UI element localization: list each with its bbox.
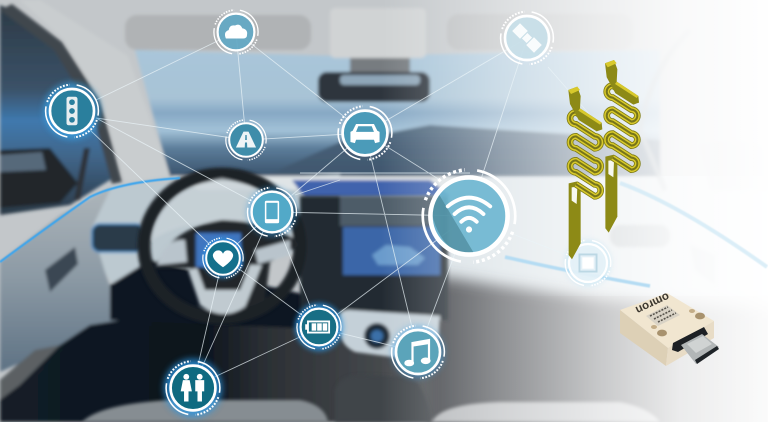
- armrest: [0, 345, 60, 400]
- node: chip: [565, 240, 611, 286]
- node: satellite: [501, 12, 553, 64]
- node: car: [338, 106, 392, 160]
- side window: [0, 5, 113, 215]
- ambient light lines: [0, 178, 767, 286]
- side mirror: [0, 148, 78, 208]
- icon: music note: [404, 339, 431, 366]
- center stack: [300, 196, 448, 320]
- QR code: [646, 305, 680, 326]
- node: music: [392, 326, 444, 378]
- lower dark cabin: [0, 285, 450, 422]
- node: heart health: [203, 238, 243, 278]
- right dark road: [265, 125, 660, 176]
- pillar: [20, 0, 170, 182]
- door handle: [45, 247, 78, 292]
- pale right dash area: [440, 176, 768, 296]
- node: people: [164, 359, 222, 417]
- icon: people: [181, 374, 204, 401]
- node: road: [226, 120, 266, 160]
- USB-C socket and plug: [672, 327, 708, 352]
- node: traffic light: [43, 82, 101, 140]
- icon: road: [236, 132, 256, 148]
- icon: satellite: [512, 23, 542, 53]
- dash left: [92, 174, 340, 300]
- brand text: omron: [634, 290, 671, 316]
- node: smartphone: [248, 188, 296, 236]
- windshield: [135, 50, 660, 176]
- far side door pillar: [640, 30, 690, 190]
- icon: heart: [213, 250, 233, 267]
- rear-view mirror: [318, 72, 430, 102]
- sun visor right: [447, 14, 633, 50]
- door panel: [0, 186, 122, 372]
- sun visor left: [125, 15, 311, 50]
- icon: phone: [265, 201, 279, 223]
- icon: traffic light: [66, 97, 78, 125]
- antenna: right: [605, 60, 639, 233]
- overhead console: [330, 8, 426, 58]
- network connection lines: [90, 32, 590, 387]
- omron USB-C module: [620, 290, 719, 366]
- icon: cloud: [225, 25, 247, 38]
- node: cloud: [214, 10, 258, 54]
- air vent: [92, 224, 144, 252]
- seats: [82, 400, 328, 422]
- icon: car: [350, 124, 380, 143]
- icon: wifi: [448, 198, 490, 233]
- node: battery: [295, 303, 343, 351]
- antenna: left: [568, 87, 602, 259]
- white wash gradient over right side: [380, 0, 768, 422]
- dark under wheel: [110, 260, 340, 330]
- right lower soft shadow: [430, 275, 768, 422]
- node: wifi: [423, 170, 515, 262]
- steering wheel: [144, 174, 300, 318]
- icon: battery: [305, 321, 330, 333]
- icon: chip: [579, 254, 597, 272]
